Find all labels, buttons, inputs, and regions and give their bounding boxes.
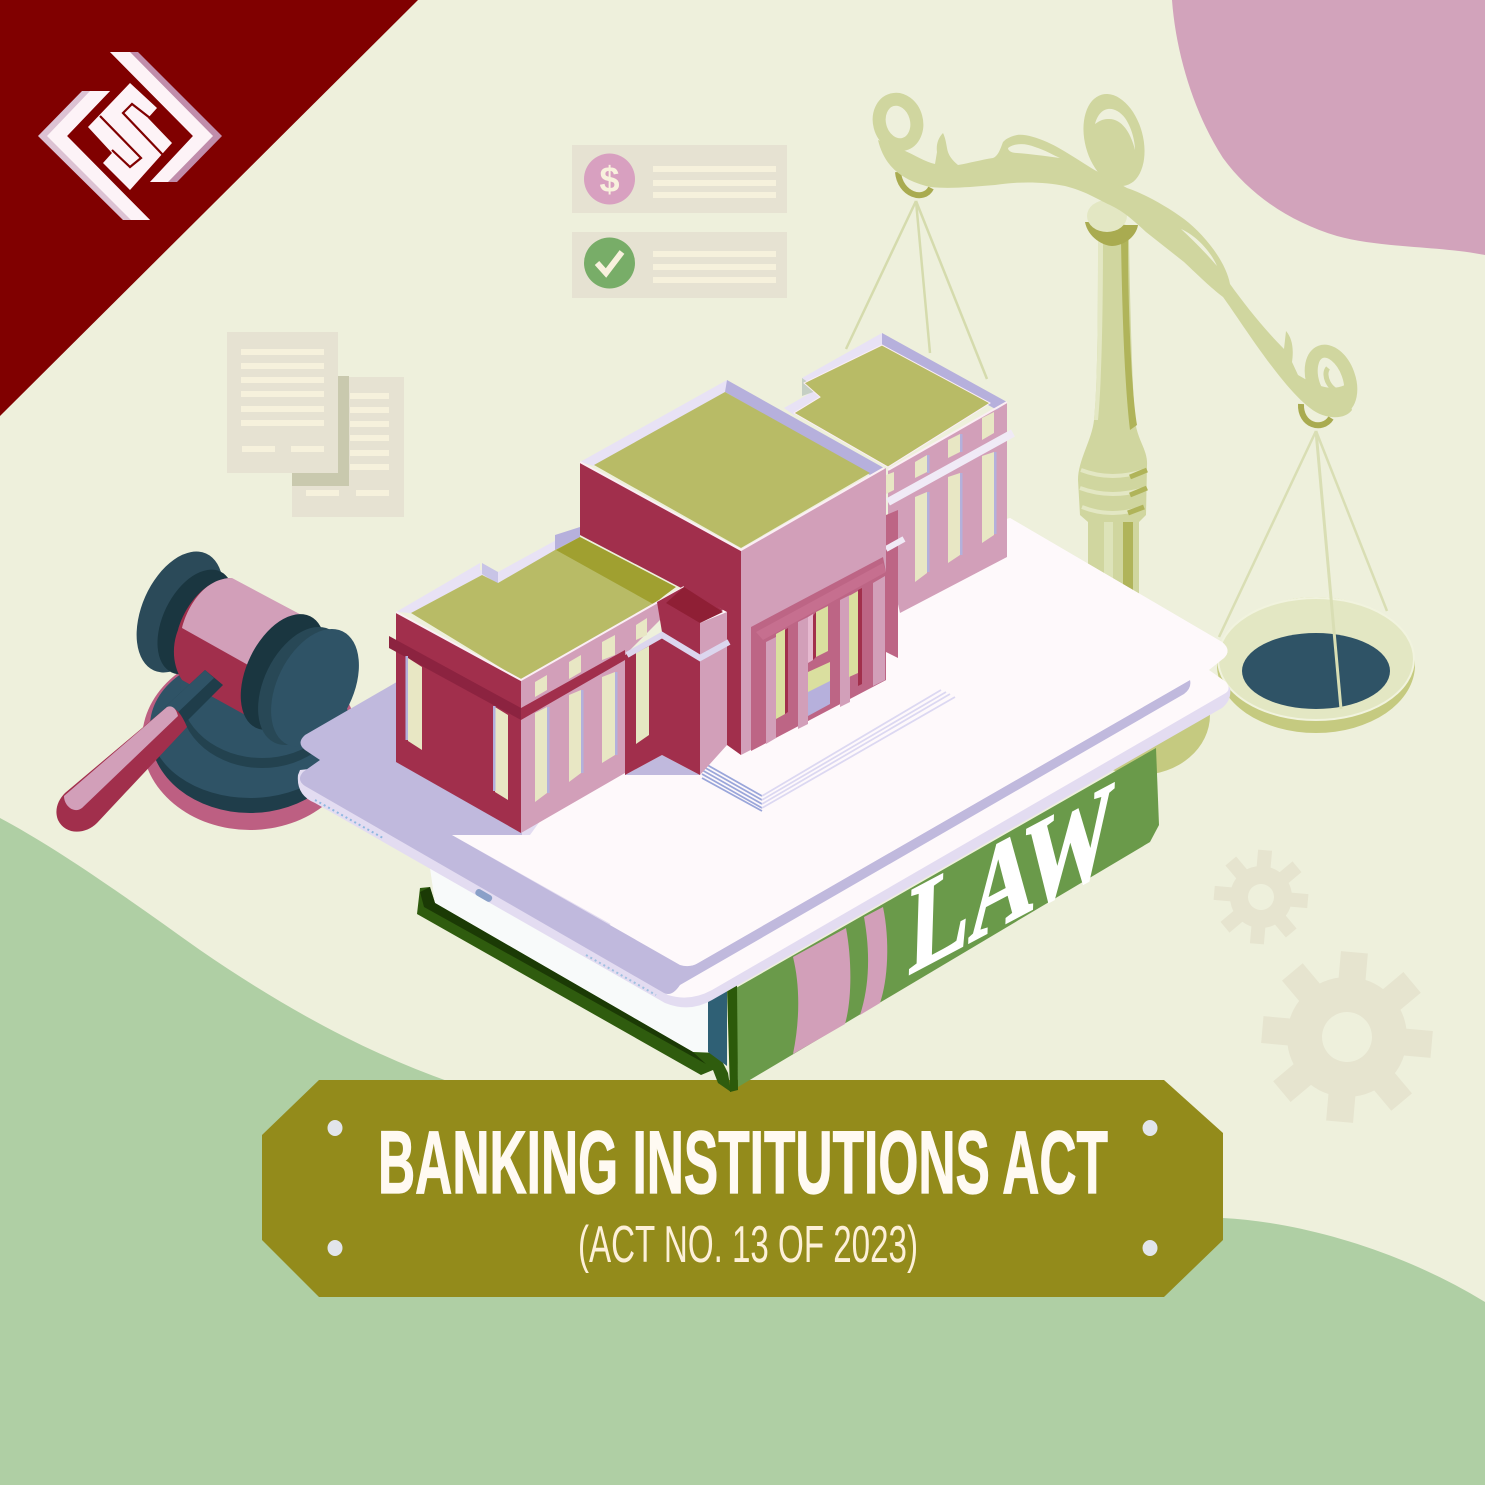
tablet screen <box>452 518 1228 966</box>
tablet bezel <box>600 518 1229 998</box>
scale base <box>1070 655 1210 775</box>
left wing <box>389 527 684 833</box>
book spine <box>708 748 1159 1092</box>
card: check <box>572 232 787 298</box>
gavel <box>56 538 377 832</box>
title plaque <box>262 1080 1223 1297</box>
gavel right disc <box>223 600 343 744</box>
spine title: LAW <box>907 752 1116 1003</box>
gavel left disc <box>119 538 241 686</box>
tablet edge <box>298 670 1230 1007</box>
right wing <box>784 333 1013 658</box>
book back cover <box>417 887 731 1092</box>
portico <box>751 557 886 751</box>
plaque subtitle: (ACT NO. 13 OF 2023) <box>578 1216 918 1274</box>
plaque rivets <box>328 1120 1158 1256</box>
sound block <box>142 622 358 830</box>
card: dollar <box>572 145 787 213</box>
corner banner <box>0 0 418 416</box>
portico door <box>808 681 830 716</box>
gavel handle <box>56 670 223 832</box>
scale column <box>1078 200 1147 595</box>
bank building <box>389 333 1013 833</box>
small gear <box>1210 846 1312 948</box>
courtyard shadow <box>625 755 700 775</box>
steps <box>702 690 955 811</box>
tablet <box>298 518 1230 1007</box>
gavel barrel <box>174 578 307 722</box>
connector <box>625 587 729 775</box>
green wave background <box>0 818 1485 1485</box>
scale pan <box>1217 431 1415 733</box>
speaker dots <box>586 955 656 995</box>
central block <box>580 380 886 755</box>
scales of justice <box>846 87 1415 775</box>
documents <box>227 332 404 517</box>
logo <box>38 52 222 220</box>
large gear <box>1255 945 1439 1129</box>
pink corner blob <box>1172 0 1485 255</box>
tablet button <box>474 888 493 903</box>
book pages <box>430 868 712 1056</box>
tablet shadow area <box>300 680 1190 994</box>
law book <box>417 748 1159 1092</box>
scale hooks <box>898 172 931 195</box>
left scale strings <box>846 201 987 379</box>
card: dollar: $ <box>599 159 620 200</box>
scale beam <box>874 87 1358 417</box>
